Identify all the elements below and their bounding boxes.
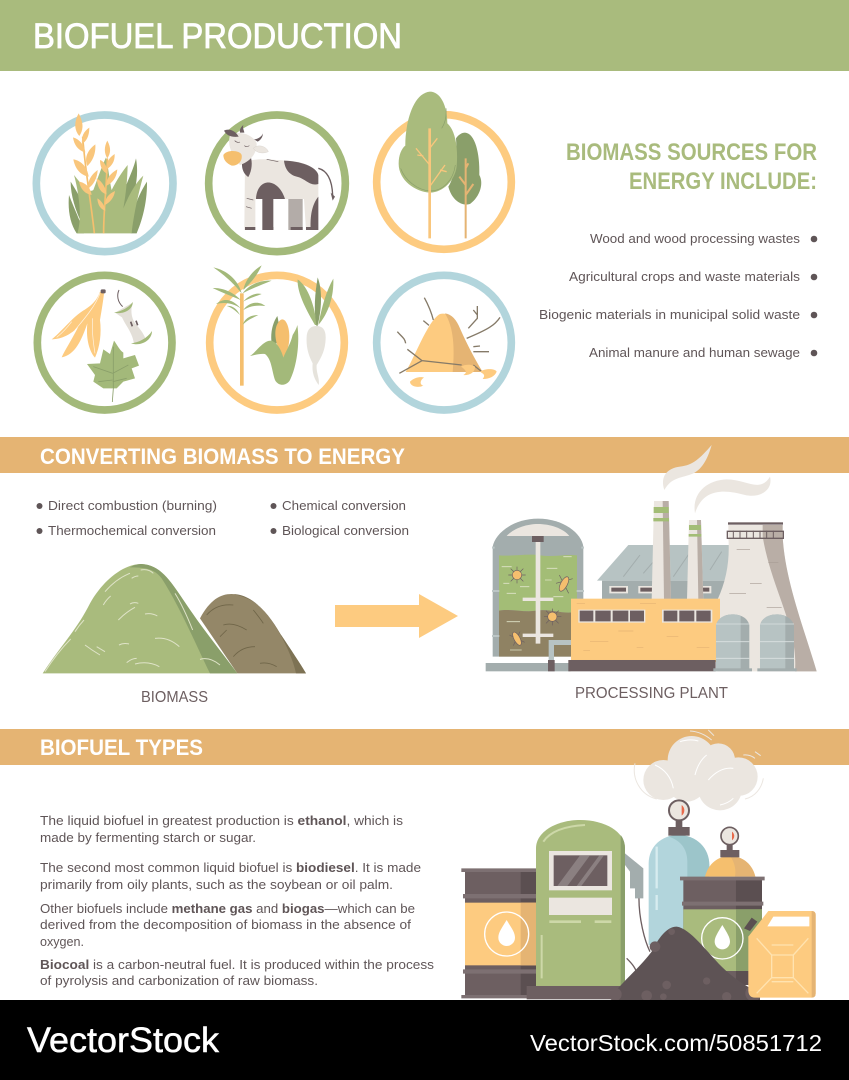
- list: biomass sources: Biogenic materials in municipal solid waste: [539, 307, 800, 322]
- label: processing plant: PROCESSING PLANT: [575, 685, 728, 702]
- hose and nozzle: [625, 853, 650, 978]
- text block: biofuel types: oxygen.: [40, 934, 84, 949]
- arrow: [335, 594, 458, 638]
- panel: biomass source icons: [36, 92, 511, 410]
- text block: biofuel types: [40, 813, 435, 988]
- digester tank: [493, 519, 583, 657]
- text block: biofuel types: The second most common liquid biofuel is biodiesel. It is made: [40, 860, 421, 875]
- cloud: [634, 730, 763, 810]
- list: biomass sources: Animal manure and human sewage: [589, 345, 800, 360]
- section band: converting biomass to energy: [0, 437, 849, 473]
- list: conversion methods: Chemical conversion: [282, 498, 406, 513]
- title banner: BIOFUEL PRODUCTION: [33, 17, 402, 56]
- text block: biofuel types: of pyrolysis and carbonization of raw biomass.: [40, 973, 318, 988]
- section band: biofuel types: [0, 729, 849, 765]
- icon: wheat and grass: [36, 113, 173, 252]
- footer bar: [0, 1000, 849, 1080]
- bacteria: [508, 567, 573, 646]
- heading: biomass sources: ENERGY INCLUDE:: [629, 168, 817, 195]
- icon: crops: [210, 265, 344, 410]
- footer bar: VectorStock.com/50851712: [530, 1030, 822, 1056]
- section band: biofuel types: BIOFUEL TYPES: [40, 735, 203, 760]
- text block: biofuel types: Biocoal is a carbon-neutral fuel. It is produced within the process: [40, 957, 435, 972]
- list: biomass sources: Wood and wood processing wastes: [590, 231, 800, 246]
- label: biomass: BIOMASS: [141, 689, 208, 706]
- list: conversion methods: [36, 498, 409, 538]
- smoke: [663, 445, 771, 513]
- list: biomass sources: [539, 231, 817, 360]
- icon: hay and branches: [377, 275, 511, 410]
- list: conversion methods: Direct combustion (burning): [48, 498, 217, 513]
- list: biomass sources: Agricultural crops and waste materials: [569, 269, 801, 284]
- section band: converting biomass to energy: CONVERTING BIOMASS TO ENERGY: [40, 444, 405, 469]
- chart: biomass piles: [43, 564, 306, 673]
- cooling tower: [717, 525, 817, 671]
- text block: biofuel types: made by fermenting starch or sugar.: [40, 830, 256, 845]
- text block: biofuel types: primarily from oily plants, such as the soybean or oil palm.: [40, 877, 393, 892]
- text block: biofuel types: derived from the decomposition of biomass in the absence of: [40, 917, 411, 932]
- coal pile: [608, 927, 761, 1001]
- text block: biofuel types: Other biofuels include methane gas and biogas—which can be: [40, 901, 415, 916]
- chimneys: [652, 501, 671, 600]
- jerry can: [748, 911, 816, 998]
- icon: trees: [377, 92, 511, 249]
- footer bar: VectorStock: [27, 1021, 220, 1060]
- gas cylinders: [649, 800, 755, 945]
- title banner: [0, 0, 849, 71]
- illustration: biofuel products: [461, 730, 816, 1001]
- text block: biofuel types: The liquid biofuel in greatest production is ethanol, which is: [40, 813, 404, 828]
- barrel green: [680, 877, 765, 985]
- barrel yellow: [461, 868, 537, 998]
- list: conversion methods: Thermochemical conversion: [48, 523, 216, 538]
- icon: food waste: [37, 275, 172, 410]
- main building: [571, 599, 720, 662]
- heading: biomass sources: [566, 139, 817, 195]
- fuel pump: [527, 820, 633, 999]
- list: conversion methods: Biological conversion: [282, 523, 409, 538]
- storage tanks: [713, 614, 797, 671]
- illustration: processing plant: [486, 445, 817, 671]
- factory hall: [597, 545, 737, 581]
- icon: cow: [209, 115, 345, 252]
